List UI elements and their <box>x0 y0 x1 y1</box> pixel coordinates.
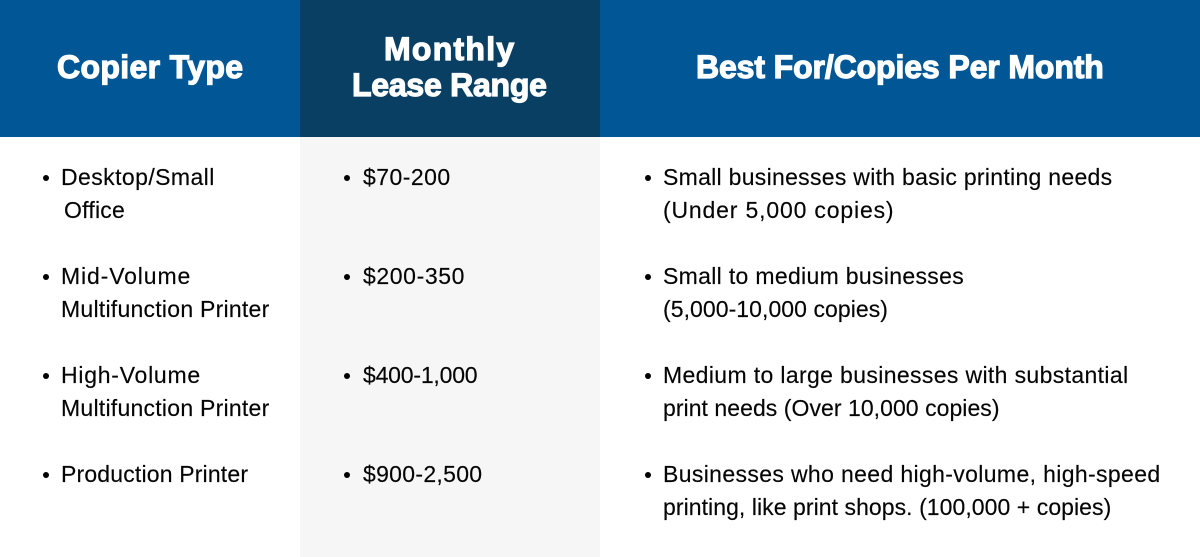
list: copier types: High-Volume <box>61 362 201 388</box>
heading: Monthly Lease Range: Monthly <box>384 31 515 67</box>
list: lease ranges: $200-350 <box>363 263 465 289</box>
heading: Best For/Copies Per Month: Best For/Copies Per Month <box>696 49 1104 85</box>
header band: copier type <box>0 0 300 137</box>
list: best for and copies per month: printing, like print shops. (100,000 + copies) <box>663 494 1111 520</box>
list: best for and copies per month: Small to medium businesses <box>663 263 964 289</box>
list: lease ranges: $400-1,000 <box>363 362 477 388</box>
list: best for and copies per month: Medium to large businesses with substantial <box>663 362 1128 388</box>
list: best for and copies per month: (Under 5,000 copies) <box>663 197 894 223</box>
list: best for and copies per month: (5,000-10,000 copies) <box>663 296 888 322</box>
header band: best for <box>600 0 1200 137</box>
list: copier types: Multifunction Printer <box>61 395 270 421</box>
list: best for and copies per month <box>645 164 1161 520</box>
list: copier types: Desktop/Small <box>61 164 215 190</box>
list: copier types: Production Printer <box>61 461 248 487</box>
panel: lease range column background <box>300 137 600 557</box>
heading: Monthly Lease Range: Lease Range <box>352 67 547 103</box>
list: copier types: Office <box>64 197 125 223</box>
heading: Copier Type: Copier Type <box>57 49 243 85</box>
list: lease ranges: $900-2,500 <box>363 461 482 487</box>
list: copier types <box>43 164 270 487</box>
list: copier types: Mid-Volume <box>61 263 191 289</box>
heading: Monthly Lease Range <box>352 31 547 104</box>
list: best for and copies per month: Businesses who need high-volume, high-speed <box>663 461 1161 487</box>
list: best for and copies per month: print needs (Over 10,000 copies) <box>663 395 1000 421</box>
list: copier types: Multifunction Printer <box>61 296 270 322</box>
list: lease ranges <box>344 164 482 487</box>
header band: monthly lease range <box>300 0 600 137</box>
list: best for and copies per month: Small businesses with basic printing needs <box>663 164 1112 190</box>
list: lease ranges: $70-200 <box>363 164 451 190</box>
